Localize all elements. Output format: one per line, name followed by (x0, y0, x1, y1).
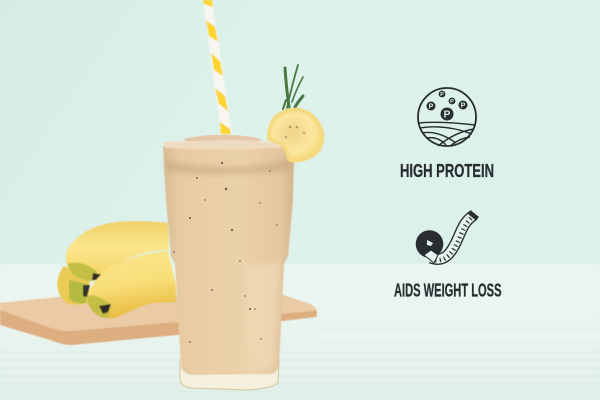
protein bubbles: P (440, 92, 444, 98)
wooden table top (0, 264, 600, 400)
smoothie body (163, 146, 294, 375)
banana: front (87, 251, 176, 318)
protein bubbles: P (461, 102, 466, 110)
foam top (183, 135, 263, 146)
banana: top (66, 221, 169, 281)
protein bubbles: P (429, 104, 434, 110)
icon: measuring tape (416, 210, 479, 263)
icon: high protein circle (418, 88, 476, 146)
glass rim (163, 140, 294, 149)
protein bubbles (426, 91, 468, 120)
label: aids weight loss: AIDS WEIGHT LOSS (394, 280, 502, 300)
cutting board (0, 295, 317, 345)
rosemary sprig (283, 65, 303, 109)
darker band near the top (166, 158, 292, 175)
lighter lower facet (246, 262, 280, 372)
protein bubbles: P (444, 110, 451, 120)
label: high protein: HIGH PROTEIN (400, 161, 494, 181)
banana: back (57, 266, 90, 305)
field lines (419, 122, 475, 146)
background wall (0, 0, 600, 268)
glass base (180, 360, 279, 390)
speckles (173, 162, 278, 343)
banana slice garnish (267, 108, 324, 162)
straw (203, 0, 232, 134)
protein bubbles: P (450, 99, 454, 105)
smoothie glass (163, 135, 294, 390)
bananas (57, 221, 176, 318)
